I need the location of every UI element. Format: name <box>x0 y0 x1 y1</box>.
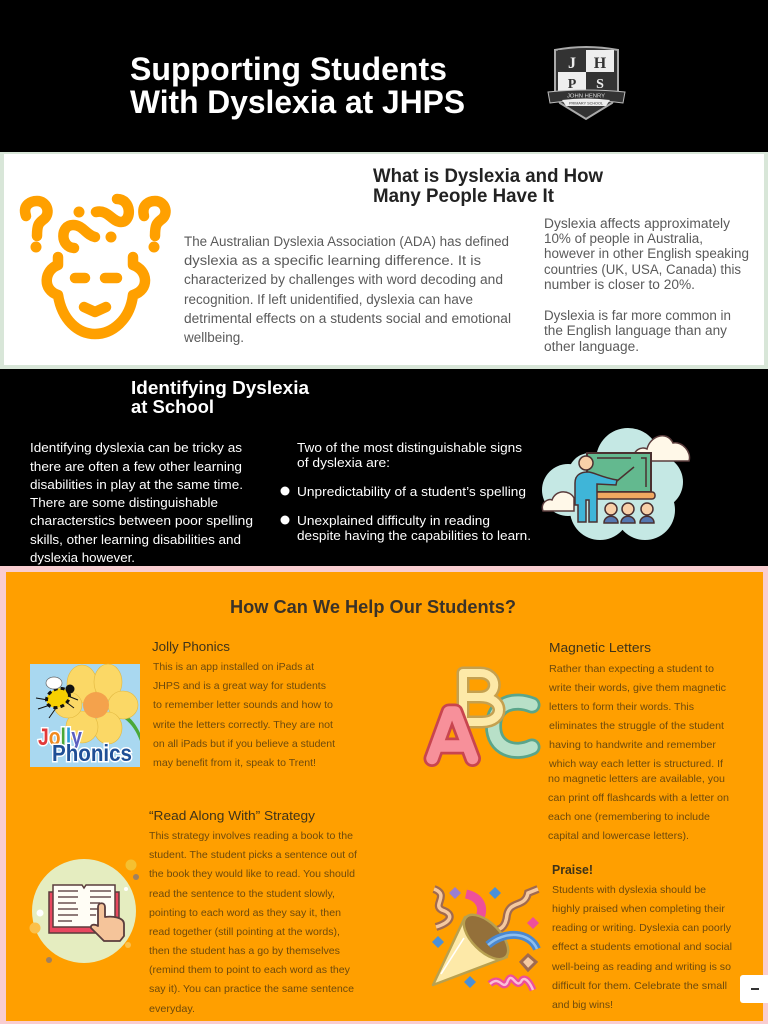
text: identifying intro: skills, other learning disabilities and <box>30 532 241 547</box>
panel: how can we help <box>0 566 768 1024</box>
text: identifying intro: there are often a few other learning <box>30 459 242 474</box>
text: praise: effect a students emotional and social <box>552 941 732 953</box>
text: prevalence: other language. <box>544 339 639 354</box>
text: definition: wellbeing. <box>183 330 244 345</box>
text: read along with strategy: (remind them to point to each word as they <box>149 964 351 976</box>
text: identifying intro: There are some distinguishable <box>30 495 218 510</box>
text: identifying intro: dyslexia however. <box>30 550 135 565</box>
text: praise: difficult for them. Celebrate the small <box>552 980 727 992</box>
text: jolly phonics: JHPS and is a great way for students <box>153 680 326 692</box>
zoom control button <box>740 975 768 1003</box>
text: read along with strategy: “Read Along With” Strategy <box>149 808 316 823</box>
text: praise: reading or writing. Dyslexia can poorly <box>552 922 732 934</box>
text: prevalence: Dyslexia affects approximately <box>544 216 730 231</box>
text: praise: and big wins! <box>552 999 613 1011</box>
text: magnetic letters: which way each letter is structured. If <box>548 758 723 770</box>
icon: teacher at board <box>542 428 690 540</box>
text: praise: well-being as reading and writing is so <box>551 961 731 973</box>
text: read along with strategy: everyday. <box>149 1003 195 1015</box>
text: magnetic letters: Magnetic Letters <box>549 640 652 655</box>
icon: confused head <box>25 199 166 334</box>
text: definition: detrimental effects on a students social and emotional <box>184 311 511 326</box>
text: magnetic letters: letters to form their words. This <box>549 701 694 713</box>
text: magnetic letters: capital and lowercase letters). <box>548 830 689 842</box>
text: read along with strategy: read the sentence to the student slowly, <box>149 888 335 900</box>
heading: how can we help: How Can We Help Our Students? <box>230 597 516 617</box>
text: praise: highly praised when completing their <box>552 903 725 915</box>
heading: identifying dyslexia: at School <box>131 396 214 417</box>
text: magnetic letters: write their words, give them magnetic <box>548 682 726 694</box>
text: prevalence: Dyslexia is far more common in <box>544 308 731 323</box>
icon: alphabet letters <box>432 673 532 758</box>
text: read along with strategy: This strategy involves reading a book to the <box>149 830 353 842</box>
text: jolly phonics: write the letters correctly. They are not <box>152 719 333 731</box>
text: magnetic letters: Rather than expecting a student to <box>549 663 714 675</box>
icon: open book with pointing hand <box>30 859 139 963</box>
text: definition: characterized by challenges with word decoding and <box>184 272 503 287</box>
text: jolly phonics: Jolly Phonics <box>152 639 231 654</box>
text: read along with strategy: student. The student picks a sentence out of <box>149 849 357 861</box>
text: identifying intro <box>30 440 253 565</box>
text: jolly phonics: to remember letter sounds and how to <box>153 699 333 711</box>
title <box>130 51 465 120</box>
icon: school crest: H <box>594 55 607 72</box>
text: definition: dyslexia as a specific learning difference. It is <box>184 253 481 268</box>
text: read along with strategy <box>149 808 357 1015</box>
icon: school crest <box>548 47 625 119</box>
text: identifying intro: disabilities in play at the same time. <box>30 477 243 492</box>
text: read along with strategy: the book they would like to read. You should <box>149 868 355 880</box>
text: definition: The Australian Dyslexia Association (ADA) has defined <box>184 234 509 249</box>
text: read along with strategy: then the student has a go by themselves <box>149 945 340 957</box>
text: magnetic letters: having to handwrite and remember <box>549 739 717 751</box>
icon: jolly phonics logo: Jolly <box>38 724 83 751</box>
icon: jolly phonics logo <box>30 664 140 767</box>
text: read along with strategy: pointing to each word as they say it, then <box>149 907 341 919</box>
text: identifying intro: Identifying dyslexia can be tricky as <box>30 440 243 455</box>
text: jolly phonics: This is an app installed on iPads at <box>153 661 314 673</box>
text: definition <box>183 234 511 345</box>
icon: party popper <box>432 887 539 990</box>
heading: what is dyslexia: What is Dyslexia and How <box>373 166 603 187</box>
panel: what is dyslexia <box>0 152 768 369</box>
icon: school crest: JOHN HENRY <box>567 94 605 100</box>
text: signs of dyslexia <box>280 440 531 543</box>
title: Supporting Students <box>130 51 447 87</box>
text: praise: Praise! <box>552 862 593 877</box>
title: With Dyslexia at JHPS <box>130 84 465 120</box>
text: read along with strategy: read together (still pointing at the words), <box>149 926 340 938</box>
icon: school crest: J <box>568 55 576 72</box>
text: prevalence: however in other English speaking <box>544 246 749 261</box>
heading: identifying dyslexia <box>131 377 310 417</box>
heading: identifying dyslexia: Identifying Dyslexia <box>131 377 310 398</box>
text: prevalence: number is closer to 20%. <box>544 277 695 292</box>
text: jolly phonics: may benefit from it, speak to Trent! <box>153 757 316 769</box>
text: magnetic letters: no magnetic letters are available, you <box>548 773 725 785</box>
text: signs of dyslexia: Unpredictability of a student’s spelling <box>297 484 526 499</box>
text: magnetic letters: each one (remembering to include <box>548 811 710 823</box>
text: magnetic letters: can print off flashcards with a letter on <box>548 792 729 804</box>
text: prevalence: the English language than any <box>544 323 727 338</box>
icon: school crest: P <box>568 77 577 92</box>
text: signs of dyslexia: Two of the most distinguishable signs <box>297 440 523 455</box>
text: jolly phonics <box>152 639 335 769</box>
icon: school crest: PRIMARY SCHOOL <box>569 102 603 106</box>
text: prevalence: 10% of people in Australia, <box>544 231 703 246</box>
heading: what is dyslexia <box>373 166 603 207</box>
text: signs of dyslexia: of dyslexia are: <box>297 455 390 470</box>
icon: school crest: S <box>596 77 604 92</box>
text: jolly phonics: on all iPads but if you believe a student <box>153 738 335 750</box>
text: signs of dyslexia: despite having the capabilities to learn. <box>297 528 531 543</box>
text: magnetic letters: eliminates the struggle of the student <box>549 720 724 732</box>
text: praise <box>551 862 732 1011</box>
heading: what is dyslexia: Many People Have It <box>373 186 555 207</box>
icon: jolly phonics logo: Phonics <box>52 740 132 766</box>
text: magnetic letters <box>548 640 729 842</box>
text: prevalence: countries (UK, USA, Canada) this <box>544 262 741 277</box>
text: definition: recognition. If left unidentified, dyslexia can have <box>184 292 473 307</box>
text: identifying intro: characterstics between poor spelling <box>30 513 253 528</box>
text: signs of dyslexia: Unexplained difficulty in reading <box>297 513 490 528</box>
text: prevalence <box>544 216 749 354</box>
text: read along with strategy: say it). You can practice the same sentence <box>149 983 354 995</box>
text: praise: Students with dyslexia should be <box>552 884 706 896</box>
